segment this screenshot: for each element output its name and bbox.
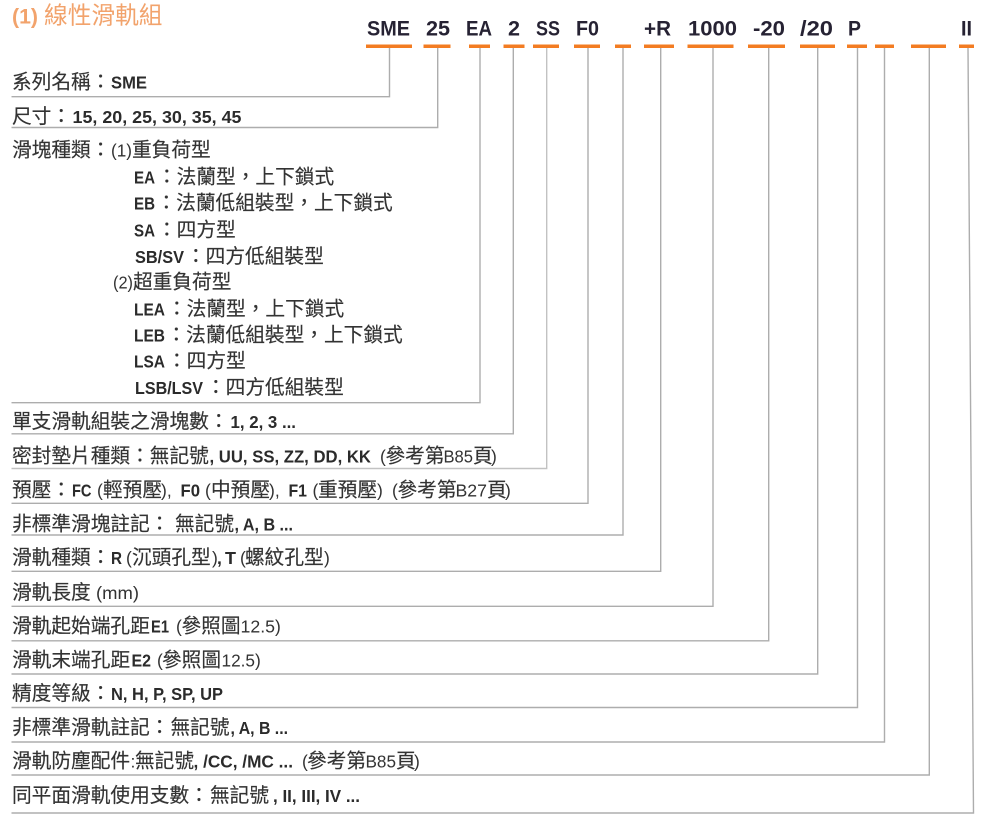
row: rail type <box>12 547 330 569</box>
row: carriages per rail: 單支滑軌組裝之滑塊數： <box>12 411 229 433</box>
row: rail length: (mm) <box>96 583 139 603</box>
block: carriage types: ：四方低組裝型 <box>186 246 324 268</box>
row: rail length: 滑軌長度 <box>12 582 91 604</box>
row: rails used on same plane: 同平面滑軌使用支數： <box>12 785 209 807</box>
row: rail end hole pitch E2: ) <box>255 650 261 670</box>
title: (1) <box>12 6 38 28</box>
row: seal type: 密封墊片種類：無記號 <box>12 446 209 468</box>
row: seal type: , UU, SS, ZZ, DD, KK <box>210 446 371 466</box>
block: carriage types: LEB <box>134 326 165 346</box>
model code segments: P <box>848 18 861 40</box>
row: size: 尺寸： <box>12 106 71 128</box>
row: rail end hole pitch E2: 參照圖 <box>162 650 221 672</box>
row: rail type: ( <box>126 548 132 568</box>
block: carriage types: (1) <box>111 140 132 160</box>
row: preload: 中預壓 <box>211 480 270 502</box>
block: carriage types: (2) <box>113 272 133 292</box>
row: rails used on same plane: 無記號 <box>210 785 269 807</box>
block: carriage types <box>12 140 403 399</box>
title: 線性滑軌組 <box>44 2 162 30</box>
row: size: 15, 20, 25, 30, 35, 45 <box>72 107 242 127</box>
block: carriage types: ：法蘭型，上下鎖式 <box>167 298 344 320</box>
row: preload <box>12 480 511 502</box>
row: non-standard rail mark: 非標準滑軌註記： <box>12 717 170 739</box>
row: preload: 頁 <box>487 480 507 502</box>
row: rail start hole pitch E1: E1 <box>151 616 169 636</box>
row: rail dust accessories: ) <box>414 752 420 772</box>
row: preload: ), <box>161 480 172 500</box>
row: seal type: 參考第 <box>386 446 445 468</box>
row: accuracy grade: 精度等級： <box>12 683 110 705</box>
row: rail end hole pitch E2: 滑軌末端孔距 <box>12 650 130 672</box>
row: rail start hole pitch E1 <box>12 616 281 638</box>
row: rail dust accessories <box>12 750 420 772</box>
block: carriage types: ：法蘭低組裝型，上下鎖式 <box>166 324 403 346</box>
model code segments: 2 <box>508 18 520 40</box>
block: carriage types: ：四方型 <box>167 350 246 372</box>
row: non-standard carriage mark <box>12 514 293 536</box>
row: rail dust accessories: B85 <box>366 752 396 772</box>
row: rail start hole pitch E1: 12.5 <box>240 616 275 636</box>
row: preload: 重預壓 <box>318 480 377 502</box>
row: carriages per rail: 1, 2, 3 ... <box>230 412 296 432</box>
row: rail start hole pitch E1: 參照圖 <box>182 616 241 638</box>
row: rail end hole pitch E2: E2 <box>132 650 151 670</box>
row: seal type: ) <box>491 446 497 466</box>
row: accuracy grade <box>12 683 223 705</box>
block: carriage types: LEA <box>134 300 165 320</box>
block: carriage types: 滑塊種類： <box>12 140 110 162</box>
row: rail dust accessories: 滑軌防塵配件 <box>12 750 130 772</box>
row: preload: ), <box>269 480 280 500</box>
row: rail type: , <box>217 548 222 568</box>
row: rail end hole pitch E2: 12.5 <box>222 650 255 670</box>
block: carriage types: LSA <box>134 352 165 372</box>
model code segments <box>367 18 972 40</box>
row: preload: 輕預壓 <box>103 480 162 502</box>
row: rail dust accessories: 頁 <box>396 750 416 772</box>
block: carriage types: EA <box>134 168 155 188</box>
model code segments: -20 <box>753 18 785 40</box>
model code segments: 1000 <box>688 18 737 40</box>
row: series name: SME <box>111 72 147 92</box>
row: rail type: T <box>225 548 236 568</box>
row: rail dust accessories: 參考第 <box>307 750 366 772</box>
row: rail dust accessories: 無記號 <box>135 750 194 772</box>
row: seal type: B85 <box>444 446 473 466</box>
model code segments: SS <box>536 18 560 40</box>
row: rail start hole pitch E1: ) <box>275 616 281 636</box>
row: non-standard carriage mark: 非標準滑塊註記： <box>12 514 170 536</box>
block: carriage types: EB <box>134 194 155 214</box>
row: accuracy grade: N, H, P, SP, UP <box>111 684 223 704</box>
block: carriage types: ：四方型 <box>157 220 236 242</box>
row: rail type: ( <box>240 548 246 568</box>
row: rail end hole pitch E2: ( <box>157 650 163 670</box>
block: carriage types: ：法蘭型，上下鎖式 <box>157 166 334 188</box>
row: rail dust accessories: , /CC, /MC ... <box>194 752 293 772</box>
orange segment bars <box>366 44 974 48</box>
row: preload: B27 <box>456 480 487 500</box>
row: non-standard rail mark <box>12 717 288 739</box>
block: carriage types: 重負荷型 <box>132 140 211 162</box>
row: rails used on same plane: , II, III, IV ... <box>273 786 360 806</box>
model code segments: +R <box>644 18 671 40</box>
block: carriage types: LSB/LSV <box>135 378 203 398</box>
row: rails used on same plane <box>12 785 360 807</box>
row: rail length <box>12 582 139 604</box>
row: series name: 系列名稱： <box>12 72 110 94</box>
row: rail end hole pitch E2 <box>12 650 261 672</box>
row: rail dust accessories: : <box>130 752 135 772</box>
row: preload: 預壓： <box>12 480 71 502</box>
model code segments: F0 <box>576 18 599 40</box>
row: preload: FC <box>72 480 92 500</box>
row: non-standard rail mark: , A, B ... <box>230 718 288 738</box>
row: seal type: 頁 <box>473 446 493 468</box>
row: non-standard rail mark: 無記號 <box>170 717 230 739</box>
row: preload: ( <box>97 480 103 500</box>
row: rail start hole pitch E1: ( <box>176 616 182 636</box>
row: rail type: ) <box>212 548 218 568</box>
row: seal type: ( <box>380 446 386 466</box>
model code segments: SME <box>367 18 410 40</box>
row: preload: F0 <box>180 480 200 500</box>
row: size <box>12 106 242 128</box>
row: preload: ( <box>312 480 318 500</box>
row: preload: 參考第 <box>398 480 457 502</box>
model code segments: EA <box>466 18 492 40</box>
row: non-standard carriage mark: , A, B ... <box>234 514 293 534</box>
row: rail start hole pitch E1: 滑軌起始端孔距 <box>12 616 150 638</box>
row: rail type: ) <box>324 548 330 568</box>
row: preload: ) <box>505 480 511 500</box>
block: carriage types: 超重負荷型 <box>133 272 231 294</box>
row: rail type: 螺紋孔型 <box>245 547 324 569</box>
row: preload: ( <box>392 480 398 500</box>
model code segments: 25 <box>426 18 450 40</box>
row: non-standard carriage mark: 無記號 <box>175 514 234 536</box>
row: preload: F1 <box>288 480 307 500</box>
row: rail type: 滑軌種類： <box>12 547 110 569</box>
block: carriage types: SA <box>134 220 155 240</box>
row: preload: ( <box>205 480 211 500</box>
row: rail dust accessories: ( <box>302 752 308 772</box>
block: carriage types: SB/SV <box>135 247 184 267</box>
row: rail type: R <box>111 548 122 568</box>
row: seal type <box>12 446 497 468</box>
model code segments: II <box>961 18 972 40</box>
row: preload: ) <box>377 480 383 500</box>
model code segments: /20 <box>800 18 833 40</box>
block: carriage types: ：法蘭低組裝型，上下鎖式 <box>156 192 393 214</box>
block: carriage types: ：四方低組裝型 <box>206 377 344 399</box>
row: rail type: 沉頭孔型 <box>132 547 211 569</box>
